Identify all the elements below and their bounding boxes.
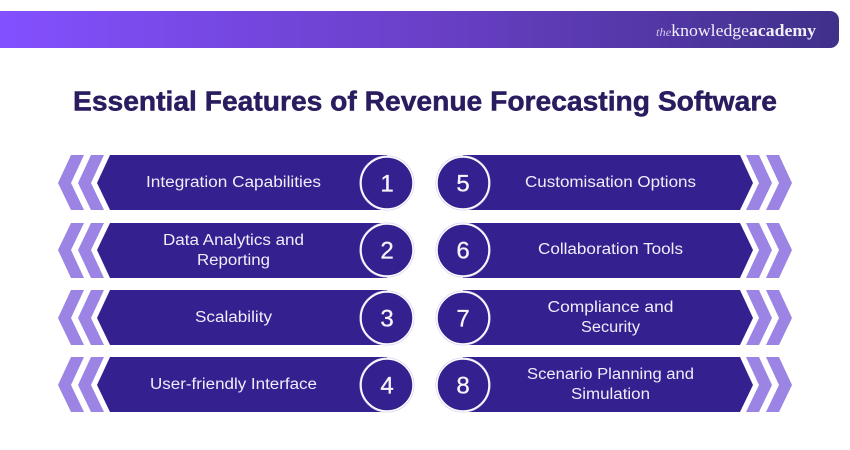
feature 2: Data Analytics and — [163, 232, 304, 249]
feature 1 — [58, 155, 414, 210]
feature 6: Collaboration Tools — [538, 241, 683, 258]
feature 4 — [58, 357, 414, 412]
feature 4: 4 — [380, 372, 394, 400]
feature 5 — [436, 155, 792, 210]
title: Essential Features of Revenue Forecasting Software — [73, 86, 777, 116]
feature 2: 2 — [380, 238, 394, 264]
feature 1: Integration Capabilities — [146, 174, 321, 191]
feature 5: Customisation Options — [525, 174, 696, 191]
feature 8 — [436, 357, 792, 412]
feature 2: Reporting — [197, 252, 270, 269]
feature 3 — [58, 290, 414, 345]
feature 7 — [436, 290, 792, 345]
feature 6 — [436, 223, 792, 278]
feature 5: 5 — [456, 170, 470, 198]
feature 8: Scenario Planning and — [527, 366, 694, 383]
feature 2 — [58, 223, 414, 278]
feature 3: Scalability — [195, 309, 272, 326]
feature 7: Security — [581, 319, 640, 336]
brand logo: theknowledgeacademy — [656, 21, 817, 40]
feature 1: 1 — [380, 170, 394, 198]
feature 7: 7 — [456, 306, 470, 332]
feature 8: 8 — [456, 372, 470, 400]
feature 3: 3 — [380, 306, 394, 332]
feature 4: User-friendly Interface — [150, 376, 317, 393]
feature 8: Simulation — [571, 386, 650, 403]
feature 6: 6 — [456, 238, 470, 264]
feature 7: Compliance and — [548, 299, 674, 316]
header banner — [0, 11, 839, 48]
